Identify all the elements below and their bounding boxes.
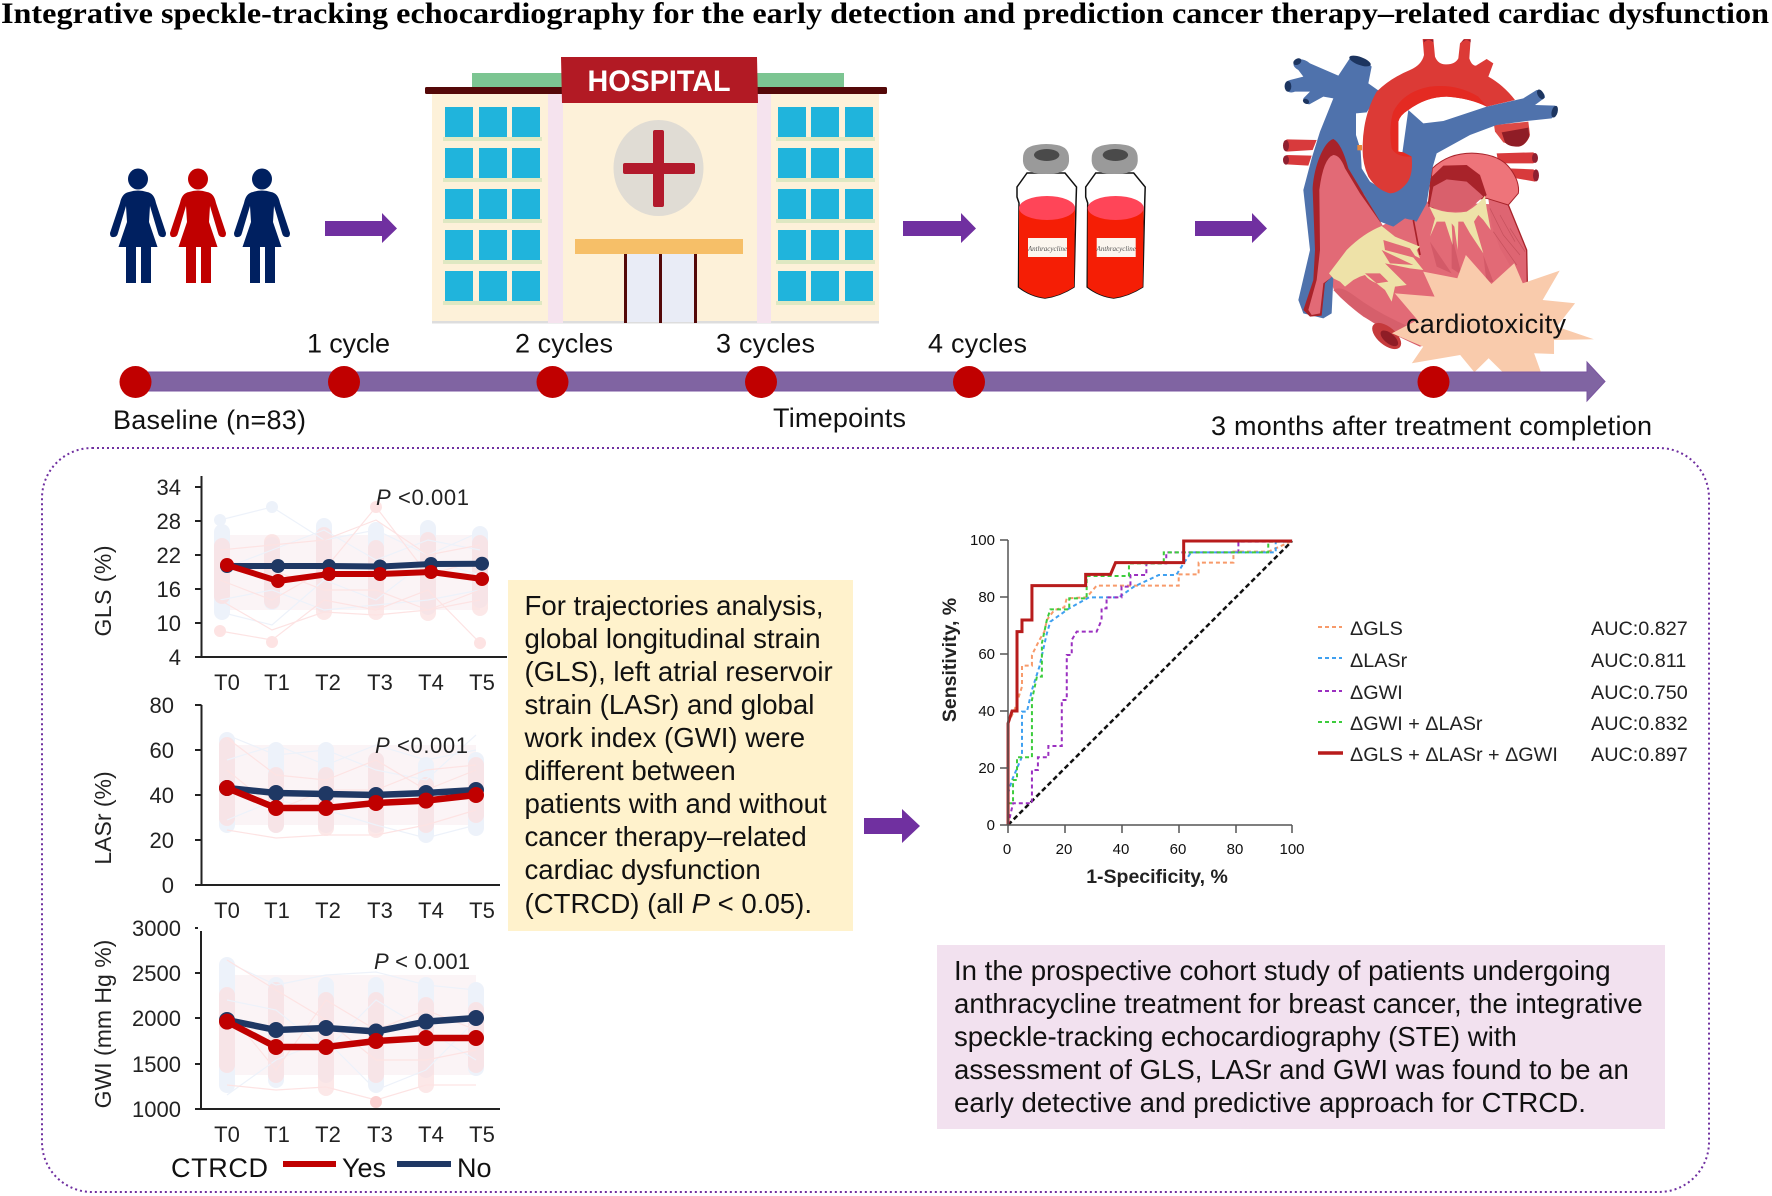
legend: CTRCD: Yes <box>342 1153 386 1183</box>
icon: anthracycline vials: Anthracycline <box>1096 245 1136 253</box>
icon: anthracycline vials: Anthracycline <box>1027 245 1067 253</box>
line chart: LASr: T3 <box>367 898 393 923</box>
text box: conclusion: In the prospective cohort study of patients undergoing <box>954 955 1611 986</box>
timeline arrow <box>135 362 1605 401</box>
chart: ROC curves: 0 <box>1003 841 1011 858</box>
left ventricle <box>1330 202 1527 347</box>
legend: CTRCD <box>171 1153 492 1183</box>
timeline labels <box>113 309 1652 441</box>
text box: trajectories analysis <box>508 580 853 931</box>
legend: CTRCD: CTRCD <box>171 1153 268 1183</box>
arrow: drug to heart <box>1195 213 1267 243</box>
arrow: patients to hospital <box>325 213 397 243</box>
line chart: GWI: T2 <box>315 1122 341 1147</box>
legend: ROC models: ΔGLS + ΔLASr + ΔGWI <box>1350 744 1558 766</box>
icon: heart <box>1283 39 1559 354</box>
chart: ROC curves <box>939 532 1305 888</box>
line chart: LASr: 20 <box>150 828 174 853</box>
line chart: GWI: GWI (mm Hg %) <box>90 940 116 1108</box>
text box: conclusion <box>937 945 1665 1129</box>
line chart: LASr: 0 <box>162 873 174 898</box>
line chart: LASr <box>90 693 500 923</box>
line chart: LASr: T4 <box>418 898 444 923</box>
line chart: GLS: P <0.001 <box>376 485 469 510</box>
text box: trajectories analysis: (CTRCD) (all P < 0.05). <box>524 888 812 919</box>
timeline dots <box>120 366 1450 398</box>
legend: ROC models <box>1318 618 1688 766</box>
line chart: LASr: LASr (%) <box>90 771 116 865</box>
timeline labels: 4 cycles <box>928 328 1027 358</box>
timeline labels: Baseline (n=83) <box>113 405 306 435</box>
timeline labels: 3 cycles <box>716 328 815 358</box>
line chart: LASr: T2 <box>315 898 341 923</box>
line chart: GLS: T2 <box>315 670 341 695</box>
line chart: GWI: 1500 <box>132 1052 181 1077</box>
line chart: LASr: T1 <box>264 898 290 923</box>
timeline labels: 2 cycles <box>515 328 613 358</box>
timeline labels: Timepoints <box>773 403 906 433</box>
chart: ROC curves: 60 <box>1170 841 1186 858</box>
arrow: hospital to drug <box>903 213 976 243</box>
chart: ROC curves: 40 <box>1113 841 1129 858</box>
line chart: GWI: 2000 <box>132 1006 181 1031</box>
line chart: LASr: T5 <box>469 898 495 923</box>
pulmonary veins <box>1284 139 1538 182</box>
line chart: GLS: 4 <box>169 645 181 670</box>
text box: trajectories analysis: strain (LASr) and global <box>524 689 814 720</box>
line chart: GWI: T5 <box>469 1122 495 1147</box>
line chart: GLS: 10 <box>157 611 181 636</box>
line chart: GLS: 28 <box>157 509 181 534</box>
tricuspid valve <box>1329 226 1423 302</box>
line chart: GLS <box>90 475 507 695</box>
icon: anthracycline vials <box>1017 144 1145 298</box>
legend: ROC models: ΔLASr <box>1350 650 1408 672</box>
legend: ROC models: AUC:0.897 <box>1591 744 1688 766</box>
text box: trajectories analysis: global longitudinal strain <box>524 623 821 654</box>
chart: ROC curves: Sensitivity, % <box>939 598 961 722</box>
chart: ROC curves: 80 <box>978 589 995 606</box>
mitral valve <box>1429 196 1491 253</box>
line chart: LASr: T0 <box>214 898 240 923</box>
text box: conclusion: speckle-tracking echocardiography (STE) with <box>954 1021 1517 1052</box>
icon: hospital <box>425 57 887 324</box>
timeline labels: 1 cycle <box>307 328 390 358</box>
descending aorta <box>1494 122 1530 147</box>
chart: ROC curves: 100 <box>1279 841 1305 858</box>
aorta <box>1363 39 1515 193</box>
line chart: GLS: T4 <box>418 670 444 695</box>
text box: trajectories analysis: work index (GWI) were <box>524 722 805 753</box>
timeline labels: cardiotoxicity <box>1406 309 1566 339</box>
timeline labels: 3 months after treatment completion <box>1211 411 1652 441</box>
line chart: GWI <box>90 916 500 1147</box>
icon: hospital: HOSPITAL <box>588 65 730 98</box>
line chart: LASr: 60 <box>150 738 174 763</box>
chart: ROC curves: 20 <box>1056 841 1072 858</box>
text box: conclusion: anthracycline treatment for breast cancer, the integrative <box>954 988 1643 1019</box>
line chart: GWI: 3000 <box>132 916 181 941</box>
chart: ROC curves: 100 <box>970 532 995 549</box>
text box: trajectories analysis: patients with and without <box>524 788 827 819</box>
line chart: GLS: GLS (%) <box>90 546 116 636</box>
left atrium <box>1428 153 1519 205</box>
legend: ROC models: AUC:0.750 <box>1591 682 1688 704</box>
text box: trajectories analysis: cardiac dysfunction <box>524 854 761 885</box>
icon: three patients <box>110 168 290 283</box>
arrow: to ROC <box>864 809 920 843</box>
line chart: GLS: T1 <box>264 670 290 695</box>
text box: trajectories analysis: cancer therapy–related <box>524 821 807 852</box>
legend: CTRCD: No <box>457 1153 492 1183</box>
line chart: GWI: 1000 <box>132 1097 181 1122</box>
legend: ROC models: AUC:0.832 <box>1591 713 1688 735</box>
right atrium <box>1303 139 1383 317</box>
apex vessel <box>1368 318 1406 354</box>
line chart: GWI: T3 <box>367 1122 393 1147</box>
line chart: GLS: 16 <box>157 577 181 602</box>
chart: ROC curves: 60 <box>978 646 995 663</box>
line chart: GLS: T0 <box>214 670 240 695</box>
line chart: GLS: T3 <box>367 670 393 695</box>
line chart: GWI: 2500 <box>132 961 181 986</box>
line chart: LASr: 80 <box>150 693 174 718</box>
blue veins and pulmonary artery <box>1285 57 1557 318</box>
legend: ROC models: AUC:0.827 <box>1591 618 1688 640</box>
line chart: GLS: T5 <box>469 670 495 695</box>
chart: ROC curves: 0 <box>987 817 995 834</box>
line chart: GLS: 22 <box>157 543 181 568</box>
line chart: GWI: P < 0.001 <box>374 949 470 974</box>
legend: ROC models: ΔGWI + ΔLASr <box>1350 713 1483 735</box>
chart: ROC curves: 40 <box>978 703 995 720</box>
line chart: LASr: 40 <box>150 783 174 808</box>
legend: ROC models: ΔGLS <box>1350 618 1403 640</box>
line chart: LASr: P <0.001 <box>375 733 468 758</box>
icon: cardiotoxicity starburst <box>1392 255 1594 372</box>
line chart: GWI: T0 <box>214 1122 240 1147</box>
panel: results frame <box>42 448 1709 1192</box>
text box: trajectories analysis: For trajectories analysis, <box>524 590 824 621</box>
line chart: GWI: T1 <box>264 1122 290 1147</box>
text box: trajectories analysis: different between <box>524 755 736 786</box>
text box: conclusion: assessment of GLS, LASr and GWI was found to be an <box>954 1054 1629 1085</box>
text box: conclusion: early detective and predictive approach for CTRCD. <box>954 1087 1586 1118</box>
legend: ROC models: ΔGWI <box>1350 682 1403 704</box>
chart: ROC curves: 1-Specificity, % <box>1086 866 1228 888</box>
chart: ROC curves: 80 <box>1227 841 1243 858</box>
line chart: GLS: 34 <box>157 475 181 500</box>
chart: ROC curves: 20 <box>978 760 995 777</box>
text box: trajectories analysis: (GLS), left atrial reservoir <box>524 656 833 687</box>
line chart: GWI: T4 <box>418 1122 444 1147</box>
legend: ROC models: AUC:0.811 <box>1591 650 1686 672</box>
